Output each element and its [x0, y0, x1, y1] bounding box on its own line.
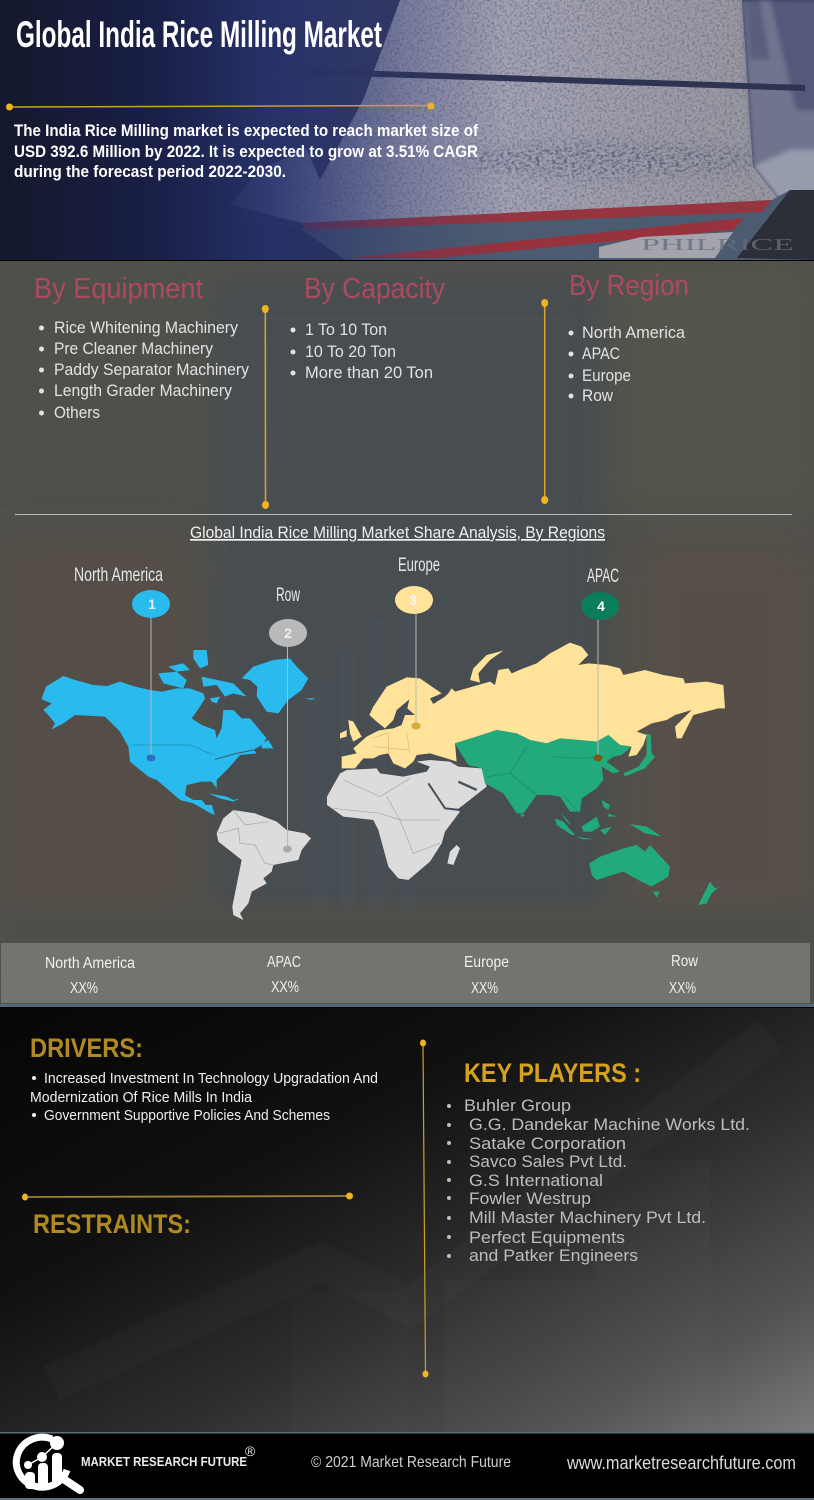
divider: left and right columns [420, 1040, 428, 1378]
intro text: The India Rice Milling market is expected to reach market size of [14, 121, 478, 140]
world map [42, 643, 725, 920]
list: equipment: Pre Cleaner Machinery [54, 339, 213, 358]
table column: europe: Europe [464, 954, 509, 971]
list: key players: Buhler Group [464, 1097, 571, 1115]
panel: by capacity [290, 273, 446, 382]
map region: north america [42, 650, 315, 815]
panel: region share table [0, 943, 814, 1007]
table column: apac: APAC [267, 954, 301, 971]
list: key players: Savco Sales Pvt Ltd. [469, 1153, 627, 1171]
table column: apac: XX% [271, 979, 299, 996]
list: key players: G.S International [469, 1172, 603, 1190]
text: website: www.marketresearchfuture.com [566, 1453, 796, 1473]
pin: apac: 4 [597, 598, 605, 614]
pin: apac: APAC [587, 565, 619, 587]
text: drivers list [30, 1070, 378, 1124]
heading: by region: By Region [569, 270, 689, 302]
list: region: Europe [582, 366, 631, 385]
pin: europe [395, 554, 440, 730]
heading: key players: KEY PLAYERS : [464, 1058, 641, 1088]
list: region: APAC [582, 344, 620, 363]
list: capacity: More than 20 Ton [305, 363, 433, 382]
list: equipment: Length Grader Machinery [54, 381, 232, 400]
table column: north america: XX% [70, 980, 98, 997]
pin: north america [74, 564, 170, 762]
intro text: USD 392.6 Million by 2022. It is expected to grow at 3.51% CAGR [14, 142, 478, 161]
pin: north america: North America [74, 564, 163, 586]
text: copyright: © 2021 Market Research Future [311, 1454, 511, 1471]
icon: market research future logo [16, 1436, 80, 1490]
intro text [14, 121, 478, 181]
list: key players [447, 1097, 750, 1265]
heading: market share analysis: Global India Rice Milling Market Share Analysis, By Regions [190, 523, 605, 542]
intro text: during the forecast period 2022-2030. [14, 162, 286, 181]
panel: drivers restraints key players background [0, 1007, 814, 1440]
map region: south america [205, 805, 311, 920]
list: region: North America [582, 323, 686, 342]
list: capacity: 10 To 20 Ton [305, 342, 396, 361]
table column: europe: XX% [471, 980, 498, 997]
pin: europe: Europe [398, 554, 440, 576]
heading: restraints: RESTRAINTS: [33, 1209, 191, 1239]
list: equipment [39, 318, 249, 422]
title: Global India Rice Milling Market [16, 14, 382, 55]
panel: by equipment [34, 273, 249, 422]
divider: equipment and capacity [262, 305, 269, 509]
heading: by equipment: By Equipment [34, 273, 203, 305]
map region: europe russia africa middle east asia oceania [327, 643, 725, 905]
pin: europe: 3 [409, 592, 417, 608]
table column: europe [464, 954, 509, 997]
list: key players: Mill Master Machinery Pvt Ltd. [469, 1209, 706, 1227]
map region: asia and oceania [455, 730, 719, 905]
text: registered mark: ® [245, 1443, 256, 1459]
list: equipment: Paddy Separator Machinery [54, 360, 249, 379]
pin: row: 2 [284, 625, 292, 641]
panel: segments and map background [0, 260, 814, 1006]
list: key players: G.G. Dandekar Machine Works Ltd. [469, 1116, 750, 1134]
table column: row [669, 953, 699, 997]
heading: drivers: DRIVERS: [30, 1033, 143, 1063]
table column: row: Row [671, 953, 699, 970]
list: region: Row [582, 386, 614, 405]
divider: capacity and region [541, 299, 548, 504]
panel: hero photo: PHILRICE [641, 235, 794, 254]
list: key players: Fowler Westrup [469, 1190, 591, 1208]
list: equipment: Rice Whitening Machinery [54, 318, 238, 337]
map region: africa and middle east [327, 760, 487, 880]
table column: north america: North America [45, 955, 135, 972]
list: key players: Satake Corporation [469, 1135, 626, 1153]
text: brand name: MARKET RESEARCH FUTURE [81, 1455, 247, 1469]
pin: apac [581, 565, 619, 762]
map region: europe and russia [340, 643, 725, 768]
text: drivers list: Increased Investment In Technology Upgradation And [44, 1070, 378, 1087]
table column: row: XX% [669, 980, 696, 997]
list: region [568, 323, 686, 405]
panel: hero photo [0, 0, 814, 260]
table column: apac [267, 954, 301, 996]
list: equipment: Others [54, 403, 100, 422]
pin: north america: 1 [148, 596, 156, 612]
pin: row [269, 584, 307, 852]
list: key players: and Patker Engineers [469, 1247, 638, 1265]
heading: by capacity: By Capacity [304, 273, 446, 305]
text: drivers list: Modernization Of Rice Mills In India [30, 1089, 253, 1106]
divider: drivers and restraints [22, 1192, 353, 1200]
list: capacity: 1 To 10 Ton [305, 320, 387, 339]
divider: hero rule with dots [6, 102, 434, 110]
pin: row: Row [276, 584, 301, 606]
panel: by region [568, 270, 689, 405]
text: drivers list: Government Supportive Policies And Schemes [44, 1107, 330, 1124]
list: key players: Perfect Equipments [469, 1229, 625, 1247]
table column: north america [45, 955, 135, 997]
list: capacity [290, 320, 433, 382]
footer [0, 1432, 814, 1500]
